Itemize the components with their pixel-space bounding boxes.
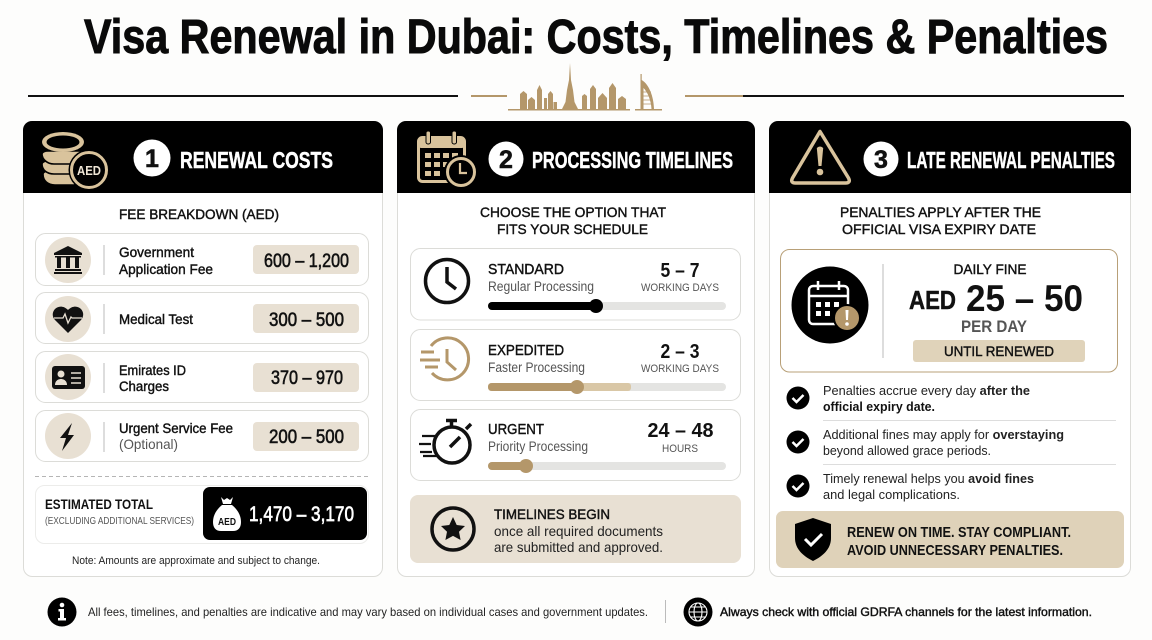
icon: money bag bbox=[213, 497, 241, 531]
icon: warning triangle bbox=[792, 132, 849, 183]
row: government application fee: Government bbox=[119, 244, 194, 260]
callout: renew on time: RENEW ON TIME. STAY COMPLIANT. bbox=[847, 524, 1071, 541]
row: standard: 5 – 7 bbox=[660, 260, 700, 282]
daily fine card: DAILY FINE bbox=[954, 261, 1026, 277]
icon: fast clock bbox=[420, 338, 469, 380]
callout: timelines begin: once all required documents bbox=[494, 523, 663, 539]
checklist item: timely renewal bbox=[786, 471, 1034, 502]
number badge 1: 1 bbox=[145, 145, 159, 173]
checklist item: overstaying bbox=[786, 427, 1064, 458]
icon: heart bbox=[53, 307, 83, 333]
daily fine card: 25 – 50 bbox=[966, 278, 1083, 319]
footer note bbox=[48, 598, 1092, 626]
estimated total bbox=[36, 486, 368, 544]
intro text: penalties apply: OFFICIAL VISA EXPIRY DATE bbox=[842, 221, 1036, 237]
row: standard: WORKING DAYS bbox=[641, 282, 719, 294]
note: Note: Amounts are approximate and subject to change. bbox=[72, 555, 320, 567]
footer note: All fees, timelines, and penalties are indicative and may vary based on individual cases and government updates. bbox=[88, 605, 648, 619]
icon: clock bbox=[426, 260, 468, 302]
panel: late renewal penalties bbox=[769, 121, 1131, 576]
icon: money bag: AED bbox=[218, 517, 236, 528]
icon: info bbox=[48, 598, 76, 626]
row: urgent service fee bbox=[36, 410, 368, 462]
panel: processing timelines bbox=[397, 121, 755, 576]
row: medical test bbox=[36, 292, 368, 344]
checklist item: overstaying: beyond allowed grace periods. bbox=[823, 443, 991, 458]
row: urgent: URGENT bbox=[488, 422, 544, 438]
number badge 3: 3 bbox=[874, 146, 888, 174]
icon: bank bbox=[54, 246, 82, 274]
checklist item: accrue: Penalties accrue every day after the bbox=[823, 383, 1030, 398]
intro text: choose option: FITS YOUR SCHEDULE bbox=[497, 221, 648, 237]
intro text: choose option bbox=[480, 204, 666, 237]
row: standard bbox=[410, 248, 740, 320]
footer note: Always check with official GDRFA channels for the latest information. bbox=[720, 605, 1092, 619]
estimated total: (EXCLUDING ADDITIONAL SERVICES) bbox=[45, 516, 194, 527]
panel 3 header bbox=[769, 121, 1131, 193]
row: emirates id charges bbox=[36, 352, 368, 402]
heading: renewal costs: RENEWAL COSTS bbox=[180, 147, 333, 173]
title divider with Dubai skyline bbox=[28, 63, 1124, 110]
number badge 1 bbox=[134, 140, 170, 176]
icon: id card bbox=[52, 366, 85, 389]
row: medical test: 300 – 500 bbox=[269, 310, 344, 331]
icon: calendar with clock bbox=[418, 131, 478, 189]
heading: fee breakdown: FEE BREAKDOWN (AED) bbox=[119, 207, 279, 222]
checklist item: accrue bbox=[786, 383, 1030, 414]
intro text: choose option: CHOOSE THE OPTION THAT bbox=[480, 204, 666, 220]
row: urgent service fee: (Optional) bbox=[119, 436, 178, 452]
callout: timelines begin: are submitted and approved. bbox=[494, 539, 663, 555]
callout: renew on time: AVOID UNNECESSARY PENALTIES. bbox=[847, 542, 1063, 559]
daily fine card: AED bbox=[909, 285, 956, 315]
row: urgent: HOURS bbox=[662, 443, 698, 455]
daily fine card: UNTIL RENEWED bbox=[944, 343, 1054, 359]
panel: renewal costs bbox=[23, 121, 383, 576]
row: emirates id charges: 370 – 970 bbox=[271, 368, 343, 389]
icon: star badge bbox=[432, 508, 474, 550]
row: urgent: 24 – 48 bbox=[648, 420, 714, 442]
row: emirates id charges: Emirates ID bbox=[119, 362, 186, 378]
intro text: penalties apply bbox=[840, 204, 1041, 237]
icon: AED coins: AED bbox=[77, 163, 101, 178]
row: urgent service fee: 200 – 500 bbox=[269, 427, 344, 448]
intro text: penalties apply: PENALTIES APPLY AFTER THE bbox=[840, 204, 1041, 220]
row: expedited: WORKING DAYS bbox=[641, 363, 719, 375]
estimated total: 1,470 – 3,170 bbox=[249, 503, 354, 526]
checklist item: overstaying: Additional fines may apply for overstaying bbox=[823, 427, 1064, 442]
checklist item: timely renewal: and legal complications. bbox=[823, 487, 960, 502]
heading: processing timelines: PROCESSING TIMELINES bbox=[532, 147, 733, 173]
number badge 3 bbox=[864, 142, 898, 176]
daily fine card: PER DAY bbox=[961, 317, 1028, 336]
row: expedited: Faster Processing bbox=[488, 360, 585, 375]
callout: timelines begin bbox=[410, 495, 741, 563]
row: urgent: Priority Processing bbox=[488, 439, 588, 454]
row: urgent bbox=[410, 410, 740, 480]
panel 1 header bbox=[23, 121, 383, 193]
row: standard: Regular Processing bbox=[488, 279, 594, 294]
icon: shield check bbox=[795, 518, 831, 561]
checklist item: timely renewal: Timely renewal helps you avoid fines bbox=[823, 471, 1034, 486]
daily fine card bbox=[780, 250, 1118, 372]
icon: calendar alert bbox=[792, 266, 868, 344]
icon: lightning bbox=[60, 423, 74, 451]
callout: renew on time bbox=[776, 511, 1124, 568]
row: emirates id charges: Charges bbox=[119, 378, 169, 394]
icon: AED coins bbox=[42, 132, 110, 190]
number badge 2 bbox=[488, 142, 524, 176]
row: expedited: EXPEDITED bbox=[488, 343, 564, 359]
callout: timelines begin: TIMELINES BEGIN bbox=[494, 506, 610, 522]
number badge 2: 2 bbox=[499, 146, 513, 174]
estimated total: ESTIMATED TOTAL bbox=[45, 496, 153, 512]
checklist item: accrue: official expiry date. bbox=[823, 399, 935, 414]
panel 2 header bbox=[397, 121, 755, 193]
row: urgent service fee: Urgent Service Fee bbox=[119, 420, 233, 436]
icon: stopwatch bbox=[419, 420, 471, 463]
row: government application fee: Application Fee bbox=[119, 261, 213, 277]
row: government application fee: 600 – 1,200 bbox=[264, 251, 349, 272]
row: expedited bbox=[410, 330, 740, 400]
row: standard: STANDARD bbox=[488, 262, 564, 278]
icon: globe bbox=[684, 598, 712, 626]
row: expedited: 2 – 3 bbox=[660, 341, 700, 363]
row: government application fee bbox=[36, 234, 368, 286]
row: medical test: Medical Test bbox=[119, 311, 193, 327]
